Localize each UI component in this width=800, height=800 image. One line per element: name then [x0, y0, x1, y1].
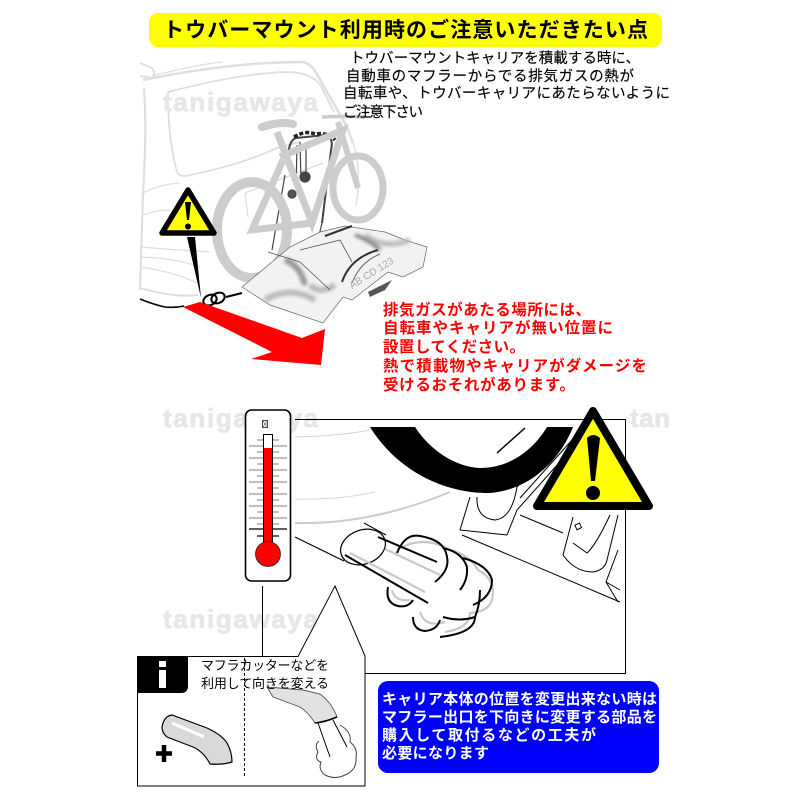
- illustration: exhaust smoke: [345, 536, 493, 637]
- red warning text: 熱で積載物やキャリアがダメージを: [383, 356, 647, 375]
- big warning sign: [537, 411, 649, 506]
- instruction paragraph: トウバーマウントキャリアを積載する時に、: [350, 50, 640, 67]
- thermometer: [246, 410, 290, 581]
- blue note: マフラー出口を下向きに変更する部品を: [382, 708, 657, 726]
- small warning sign: [162, 190, 214, 298]
- plus sign: [156, 745, 172, 762]
- blue note: 必要になります: [382, 744, 489, 762]
- illustration: carrier base: [242, 226, 427, 323]
- panel: exhaust detail frame: [295, 420, 626, 674]
- callout text: [201, 658, 329, 691]
- leader line: [262, 586, 264, 656]
- divider: [244, 658, 246, 778]
- red warning text: 設置してください。: [383, 338, 525, 356]
- blue note: 購入して取付るなどの工夫が: [382, 726, 596, 744]
- illustration: carrier rack uprights: [272, 133, 335, 250]
- watermark: tanigawaya right: tan: [630, 403, 670, 433]
- title banner: トウバーマウント利用時のご注意いただきたい点: [163, 18, 648, 42]
- red warning text: 受けるおそれがあります。: [383, 375, 575, 394]
- title banner: [149, 13, 662, 47]
- panel: info callout: [137, 586, 365, 786]
- fitted cutter with smoke: [267, 687, 356, 778]
- blue note: キャリア本体の位置を変更出来ない時は: [382, 690, 657, 708]
- illustration: bicycle: [217, 116, 383, 278]
- illustration: exhaust pipe: [140, 291, 242, 307]
- watermark: tanigawaya top: tanigawaya: [163, 87, 319, 117]
- number plate: AB CD 123: [348, 255, 396, 292]
- info badge: [137, 656, 188, 693]
- instruction paragraph: 自転車や、トウバーキャリアにあたらないように: [343, 85, 670, 102]
- cutter part: [162, 715, 232, 764]
- red warning text: [383, 300, 647, 394]
- illustration: car rear outline: [140, 62, 358, 296]
- watermark: tanigawaya middle: tanigawaya: [163, 403, 319, 433]
- blue note: [378, 681, 659, 773]
- red arrow: [183, 302, 325, 365]
- watermark: tanigawaya lower: tanigawaya: [163, 604, 319, 634]
- instruction paragraph: 自動車のマフラーからでる排気ガスの熱が: [346, 68, 634, 85]
- instruction paragraph: [343, 50, 670, 121]
- red warning text: 排気ガスがあたる場所には、: [383, 300, 591, 319]
- red warning text: 自転車やキャリアが無い位置に: [383, 318, 613, 337]
- instruction paragraph: ご注意下さい: [343, 104, 423, 121]
- illustration: carrier clamps: [460, 430, 620, 602]
- callout text: 利用して向きを変える: [201, 676, 329, 691]
- callout text: マフラカッターなどを: [201, 658, 329, 673]
